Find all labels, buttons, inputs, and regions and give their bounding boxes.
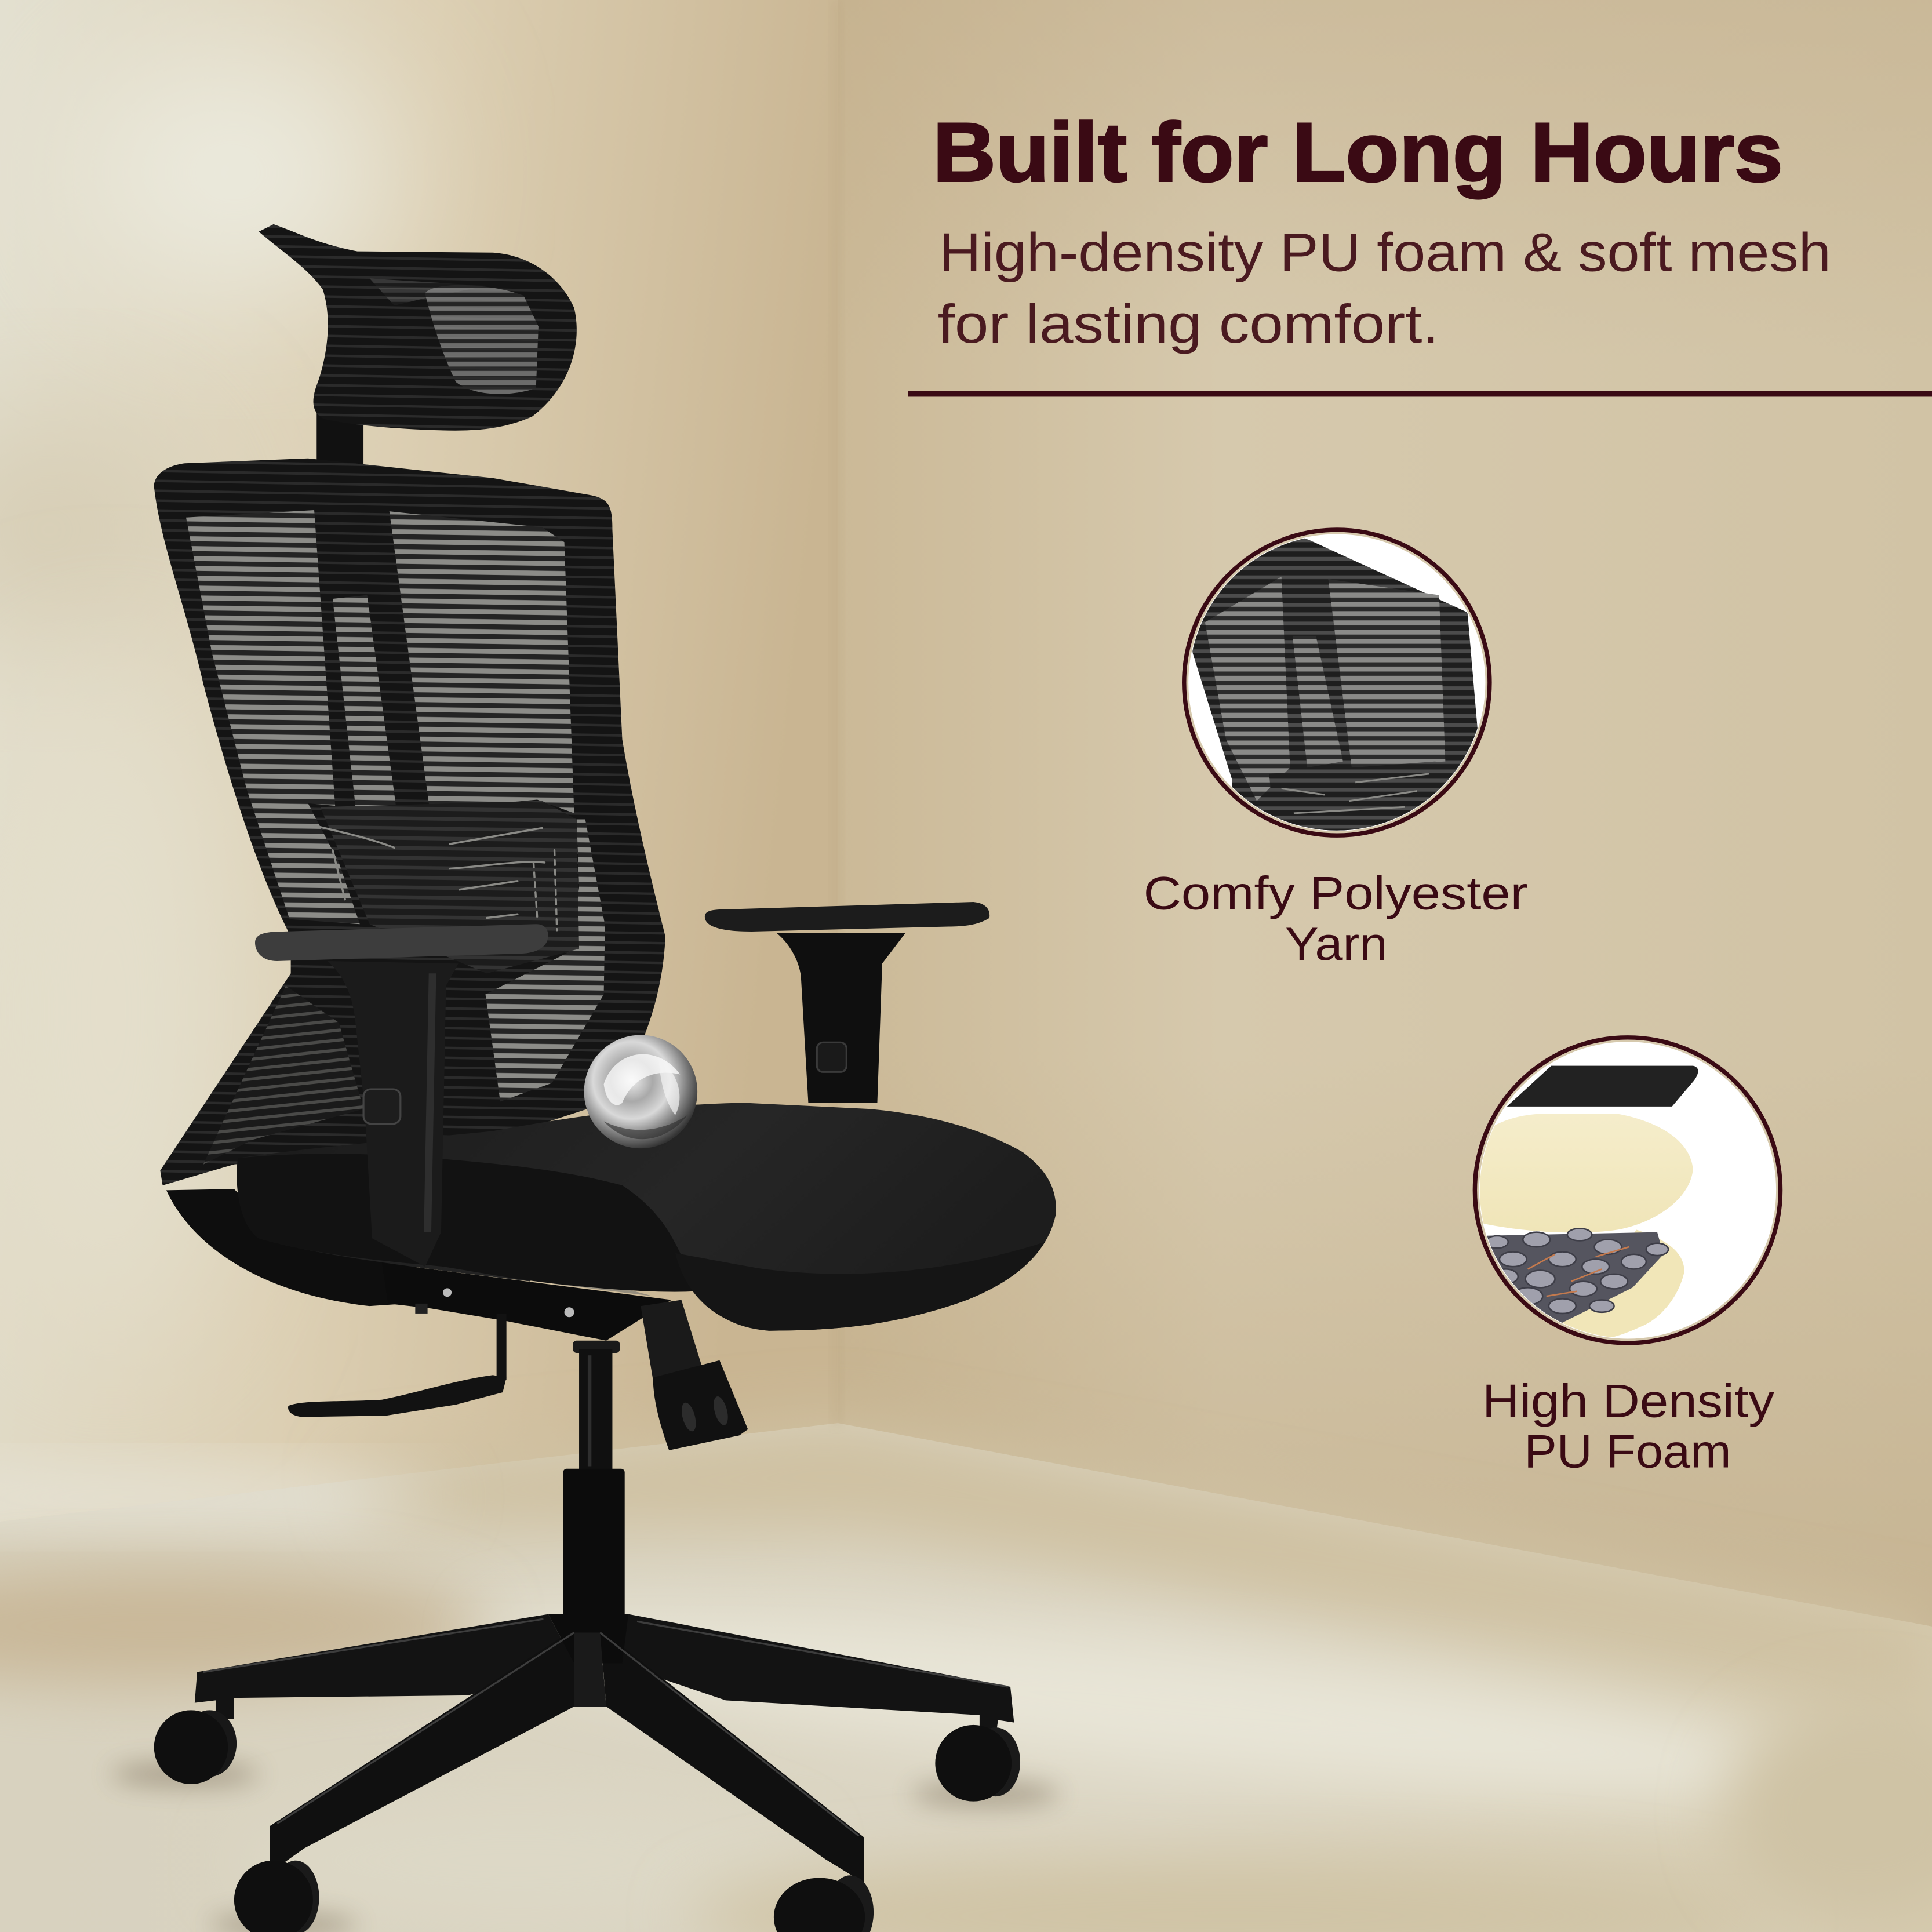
caster: front left xyxy=(234,1861,319,1932)
label: high density PU foam: PU Foam xyxy=(1524,1426,1731,1478)
caster: rear left xyxy=(154,1710,237,1784)
subtitle: High-density PU foam & soft mesh xyxy=(939,222,1831,283)
label: high density PU foam: High Density xyxy=(1482,1375,1775,1427)
chair mechanism plate xyxy=(382,1263,671,1341)
caster shadows xyxy=(111,1762,1060,1932)
chair headrest xyxy=(259,224,577,468)
base leg: front left xyxy=(270,1629,574,1873)
base leg: left xyxy=(195,1614,574,1719)
base leg: front right xyxy=(600,1629,864,1883)
left armrest xyxy=(255,924,548,1267)
circle: mesh close-up xyxy=(1182,527,1492,838)
title: Built for Long Hours xyxy=(933,105,1783,199)
lumbar support xyxy=(314,801,579,973)
metal ball xyxy=(584,1035,697,1148)
tension knob xyxy=(641,1300,748,1450)
chair seat cushion xyxy=(237,1103,1056,1331)
mesh panel: centre xyxy=(333,595,396,812)
base leg: right xyxy=(616,1614,1014,1737)
five-star base xyxy=(195,1614,1014,1883)
caster: rear right xyxy=(935,1725,1020,1802)
gas lift column xyxy=(563,1341,625,1635)
subtitle xyxy=(938,222,1831,354)
office chair xyxy=(154,224,1056,1932)
label: comfy polyester yarn: Comfy Polyester xyxy=(1144,868,1528,920)
mesh panel: upper right xyxy=(390,511,574,813)
label: comfy polyester yarn xyxy=(1144,868,1528,970)
label: comfy polyester yarn: Yarn xyxy=(1285,918,1387,970)
label: high density PU foam xyxy=(1482,1375,1775,1478)
chair mesh backrest xyxy=(154,459,665,1185)
mesh panel: upper left xyxy=(186,510,360,924)
mesh panel: lower left xyxy=(203,986,363,1165)
circle: foam layers close-up xyxy=(1467,1038,1781,1343)
caster: front right xyxy=(774,1875,874,1932)
subtitle: for lasting comfort. xyxy=(938,293,1439,354)
feature: PU foam xyxy=(1467,1038,1781,1478)
tilt lever xyxy=(288,1314,507,1417)
chair rear bracket xyxy=(166,1189,425,1306)
mesh panel: lower right xyxy=(486,820,605,1101)
feature: polyester yarn xyxy=(1146,527,1527,960)
heading divider xyxy=(908,391,1932,396)
right armrest xyxy=(705,902,989,1103)
